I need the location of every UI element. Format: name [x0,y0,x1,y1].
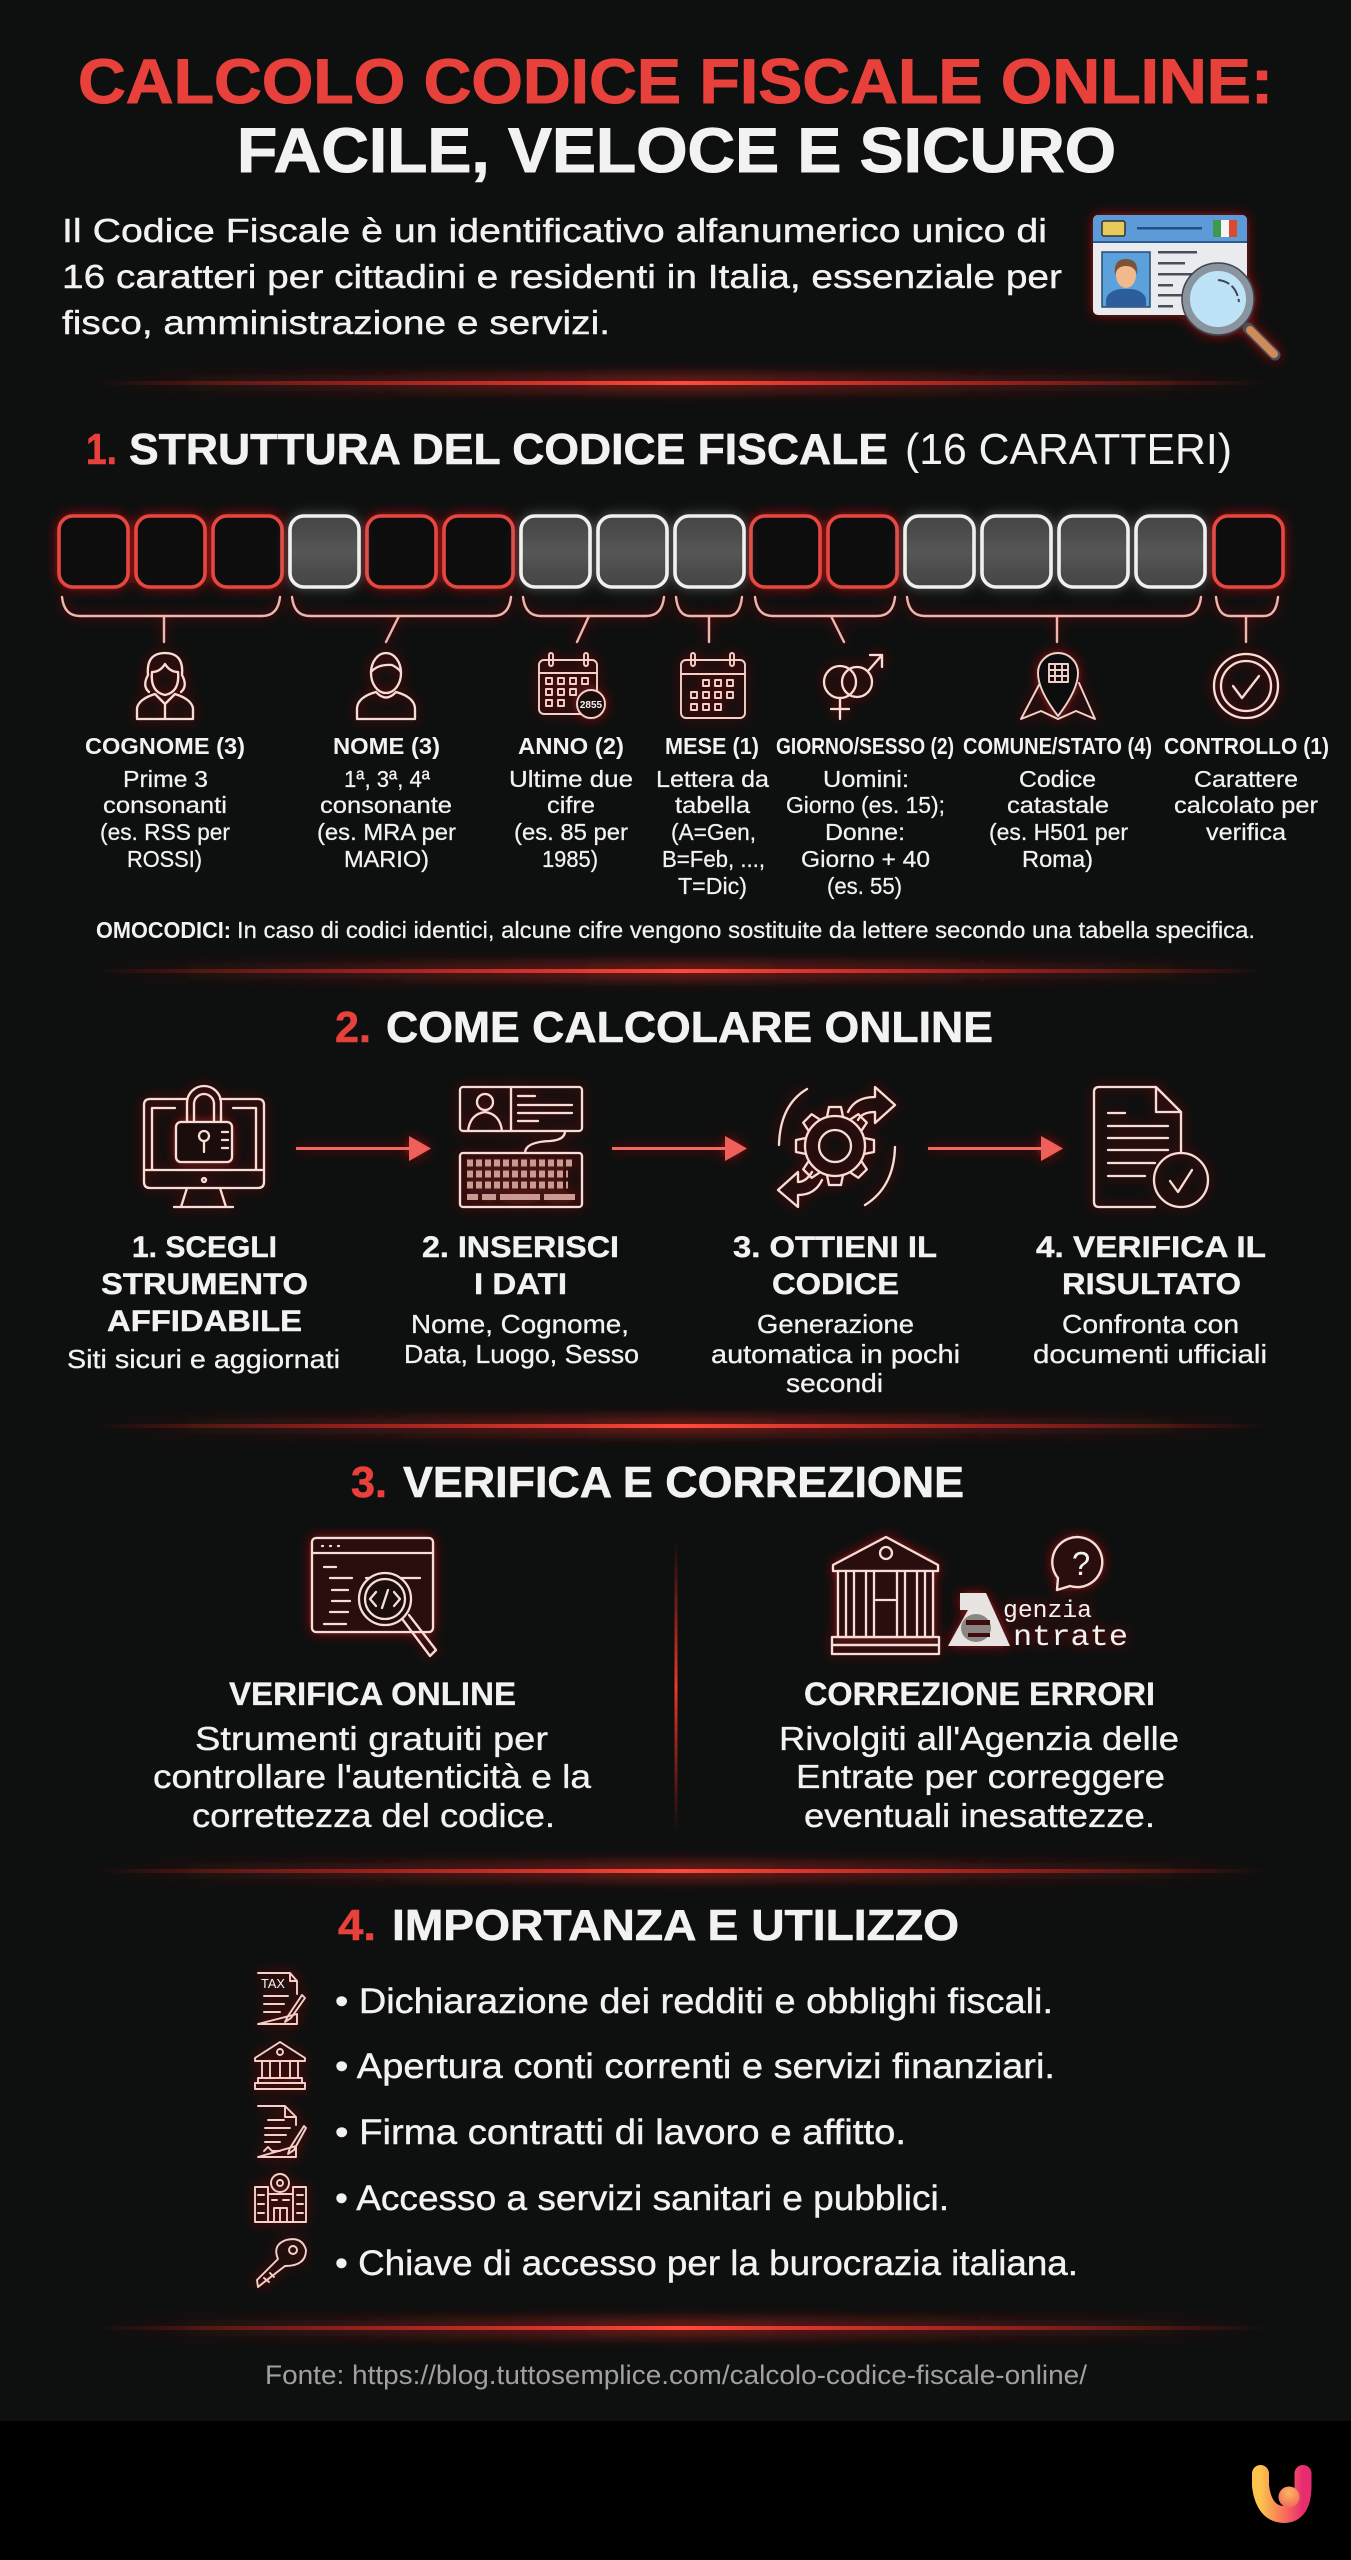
heading: struttura: 1. [86,425,117,474]
step 1: AFFIDABILE [107,1305,302,1338]
column: mese: Lettera da [656,766,769,792]
step 3: automatica in pochi [711,1339,960,1369]
column: controllo: Carattere [1194,766,1298,792]
section: header [62,47,1275,355]
heading: struttura [86,425,1232,474]
icon: calendar with year [539,653,605,718]
column: mese: (A=Gen, [671,819,756,845]
step 2: Data, Luogo, Sesso [404,1339,639,1369]
title: CALCOLO CODICE FISCALE ONLINE: [78,47,1273,117]
panel: correzione errori: CORREZIONE ERRORI [804,1676,1155,1712]
icon: temple [832,1537,939,1654]
column: mese: MESE (1) [665,733,759,759]
arrow 1 [296,1136,431,1161]
column: nome [317,653,456,872]
column: mese [656,653,769,899]
panel: correzione errori [779,1537,1179,1834]
column: anno [509,653,633,872]
step 2: Nome, Cognome, [411,1309,629,1339]
heading: importanza e utilizzo: IMPORTANZA E UTILIZZO [392,1901,959,1950]
panel: verifica online: correttezza del codice. [192,1797,555,1834]
column: comune/stato: (es. H501 per [989,819,1128,845]
heading: verifica e correzione: VERIFICA E CORREZIONE [403,1458,964,1507]
heading: struttura: STRUTTURA DEL CODICE FISCALE [129,425,888,474]
column: giorno/sesso: GIORNO/SESSO (2) [776,733,954,759]
icon: key [257,2239,306,2287]
list item: servizi sanitari: • Accesso a servizi sanitari e pubblici. [335,2179,949,2218]
step 1: 1. SCEGLI [132,1231,277,1264]
list item: redditi: • Dichiarazione dei redditi e obblighi fiscali. [335,1982,1053,2021]
icon: gender symbols [824,655,882,719]
step 3: secondi [786,1368,883,1398]
column: nome: NOME (3) [333,733,440,759]
icon: tax form: TAX [261,1976,285,1991]
icon: ID card with magnifier [1093,215,1275,355]
icon: monitor with lock [144,1086,264,1207]
arrow 3 [928,1136,1063,1161]
column: giorno/sesso: Uomini: [823,766,909,792]
icon: bank [255,2042,305,2089]
logo: agenzia entrate [948,1593,1128,1655]
step 3: Generazione [757,1309,914,1339]
icon: man [357,653,415,719]
list item: contratti: • Firma contratti di lavoro e affitto. [335,2113,906,2152]
column: controllo: CONTROLLO (1) [1164,733,1329,759]
column: nome: 1ª, 3ª, 4ª [344,766,430,792]
intro text: fisco, amministrazione e servizi. [62,304,610,341]
icon: browser code magnifier [312,1538,436,1656]
source line: Fonte: https://blog.tuttosemplice.com/calcolo-codice-fiscale-online/ [265,2360,1088,2390]
heading: struttura: (16 CARATTERI) [905,425,1232,474]
column: cognome [85,653,245,872]
step 3: CODICE [772,1268,899,1301]
intro text [62,212,1062,341]
icon: tax form [258,1973,305,2024]
icon: map pin with building [1021,653,1095,719]
heading: importanza e utilizzo: 4. [338,1901,376,1950]
column: giorno/sesso: Giorno + 40 [801,846,930,872]
column: comune/stato: COMUNE/STATO (4) [963,733,1152,759]
panel: verifica online: Strumenti gratuiti per [195,1720,548,1757]
icon: keyboard and ID card [460,1087,582,1207]
omocodici note: OMOCODICI: [96,917,231,943]
column: comune/stato: Roma) [1022,846,1093,872]
icon: question bubble [1052,1537,1102,1590]
section 3: verification and correction [153,1458,1179,1834]
column: giorno/sesso: Donne: [825,819,905,845]
icon: question bubble: ? [1072,1545,1090,1582]
column: controllo: calcolato per [1174,792,1318,818]
icon: calendar with year: 2855 [580,700,603,711]
16 character boxes [59,516,1283,587]
step 3 [711,1087,960,1398]
column: anno: ANNO (2) [518,733,624,759]
heading: come calcolare: COME CALCOLARE ONLINE [386,1003,993,1052]
list item: contratti [258,2106,906,2157]
column: comune/stato: Codice [1019,766,1096,792]
icon: check seal [1214,654,1278,718]
column: mese: B=Feb, ..., [662,846,765,872]
column: controllo: verifica [1206,819,1286,845]
list item: servizi sanitari [255,2174,949,2222]
arrow 2 [612,1136,747,1161]
column: anno: Ultime due [509,766,633,792]
column: nome: consonante [320,792,452,818]
step 4: 4. VERIFICA IL [1036,1231,1266,1264]
column: giorno/sesso: (es. 55) [827,873,902,899]
column: mese: tabella [675,792,750,818]
step 4: documenti ufficiali [1033,1339,1267,1369]
column: comune/stato [963,653,1152,872]
step 3: 3. OTTIENI IL [733,1231,937,1264]
heading: verifica e correzione: 3. [351,1458,387,1507]
intro text: 16 caratteri per cittadini e residenti in Italia, essenziale per [62,258,1062,295]
section 1: structure [59,425,1329,943]
column: cognome: ROSSI) [127,846,202,872]
column: cognome: consonanti [103,792,227,818]
section 2: how to calculate [67,1003,1267,1398]
step 4: Confronta con [1062,1309,1239,1339]
icon: hospital [255,2174,306,2222]
title [78,47,1273,186]
step 2: 2. INSERISCI [422,1231,619,1264]
column: nome: MARIO) [344,846,429,872]
column: giorno/sesso: Giorno (es. 15); [786,792,945,818]
omocodici note: In caso di codici identici, alcune cifre vengono sostituite da lettere secondo una tabella specifica. [237,917,1255,943]
column: cognome: Prime 3 [123,766,208,792]
icon: document with check [1094,1087,1208,1207]
column: mese: T=Dic) [678,873,747,899]
step 2 [404,1087,639,1369]
column: giorno/sesso [776,655,954,899]
logo: agenzia entrate: genzia [1003,1598,1092,1625]
step 1 [67,1086,340,1374]
list item: conti correnti: • Apertura conti correnti e servizi finanziari. [335,2047,1055,2086]
step 4: RISULTATO [1062,1268,1241,1301]
title: FACILE, VELOCE E SICURO [237,116,1116,186]
column: controllo [1164,654,1329,845]
list item: redditi [258,1973,1053,2024]
panel: correzione errori: Rivolgiti all'Agenzia delle [779,1720,1179,1757]
intro text: Il Codice Fiscale è un identificativo alfanumerico unico di [62,212,1047,249]
logo [1260,2474,1303,2514]
panel: verifica online [153,1538,592,1834]
icon: calendar [681,653,745,718]
column: anno: 1985) [542,846,598,872]
column: cognome: COGNOME (3) [85,733,245,759]
step 1: Siti sicuri e aggiornati [67,1344,340,1374]
column: cognome: (es. RSS per [100,819,230,845]
list item: conti correnti [255,2042,1055,2089]
column: nome: (es. MRA per [317,819,456,845]
list item: burocrazia: • Chiave di accesso per la burocrazia italiana. [335,2244,1078,2283]
heading: come calcolare: 2. [335,1003,371,1052]
column: anno: (es. 85 per [514,819,628,845]
logo: agenzia entrate: ntrate [1013,1621,1128,1655]
step 4 [1033,1087,1267,1369]
panel: verifica online: controllare l'autenticità e la [153,1758,592,1795]
icon: contract signing [258,2106,306,2157]
column: comune/stato: catastale [1007,792,1109,818]
brackets [62,597,1278,642]
panel: correzione errori: eventuali inesattezze. [804,1797,1155,1834]
column: anno: cifre [547,792,595,818]
icon: gear with cycle arrows [778,1087,895,1207]
panel: verifica online: VERIFICA ONLINE [229,1676,516,1712]
icon: woman [137,653,193,719]
step 1: STRUMENTO [101,1268,308,1301]
step 2: I DATI [474,1268,567,1301]
section 4: importance and use [255,1901,1078,2287]
panel: correzione errori: Entrate per correggere [796,1758,1165,1795]
